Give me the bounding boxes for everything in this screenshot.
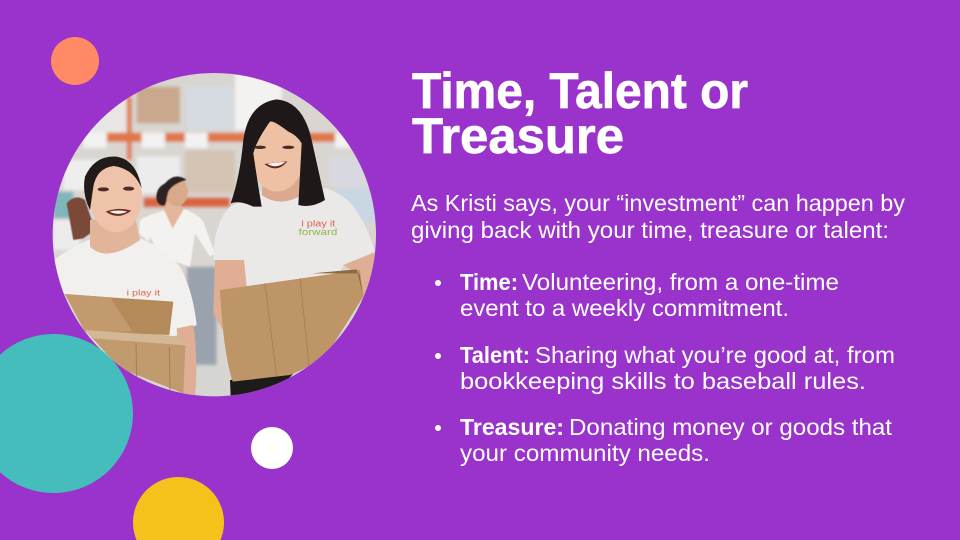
bullet: talent: Sharing what you’re good at, from bbox=[535, 342, 895, 368]
decorative circle: teal bbox=[0, 334, 133, 493]
intro text: As Kristi says, your “investment” can happen by bbox=[411, 190, 906, 216]
bullet: talent: Talent: bbox=[460, 342, 530, 368]
bullet: treasure bbox=[435, 414, 893, 466]
photo: two volunteers carrying boxes bbox=[52, 73, 376, 396]
background volunteer bbox=[67, 177, 215, 267]
box bbox=[220, 270, 363, 382]
right volunteer: forward bbox=[299, 227, 337, 237]
warehouse shelves background bbox=[52, 73, 376, 396]
title: Treasure bbox=[412, 108, 624, 164]
boxes bbox=[65, 294, 173, 335]
right volunteer bbox=[213, 99, 375, 397]
decorative circle: white bbox=[251, 427, 293, 469]
bullet: talent: bookkeeping skills to baseball rules. bbox=[460, 368, 866, 394]
decorative circle: yellow bbox=[133, 477, 224, 540]
bullet: treasure: Donating money or goods that bbox=[569, 414, 893, 440]
title: Time, Talent or bbox=[412, 63, 748, 119]
right volunteer: i play it bbox=[301, 218, 336, 228]
bullet: treasure: Treasure: bbox=[460, 414, 564, 440]
left volunteer: i play it bbox=[127, 288, 161, 298]
bullet: treasure: your community needs. bbox=[460, 440, 710, 466]
bullet: time: Time: bbox=[460, 269, 518, 295]
bullet: time: event to a weekly commitment. bbox=[460, 295, 789, 321]
left volunteer bbox=[54, 157, 197, 397]
title bbox=[412, 63, 748, 164]
intro text bbox=[411, 190, 906, 243]
bullet: time bbox=[435, 269, 839, 321]
intro text: giving back with your time, treasure or talent: bbox=[411, 217, 889, 243]
bullet: talent bbox=[435, 342, 895, 394]
bullet: time: Volunteering, from a one-time bbox=[522, 269, 839, 295]
decorative circle: orange bbox=[51, 37, 99, 85]
